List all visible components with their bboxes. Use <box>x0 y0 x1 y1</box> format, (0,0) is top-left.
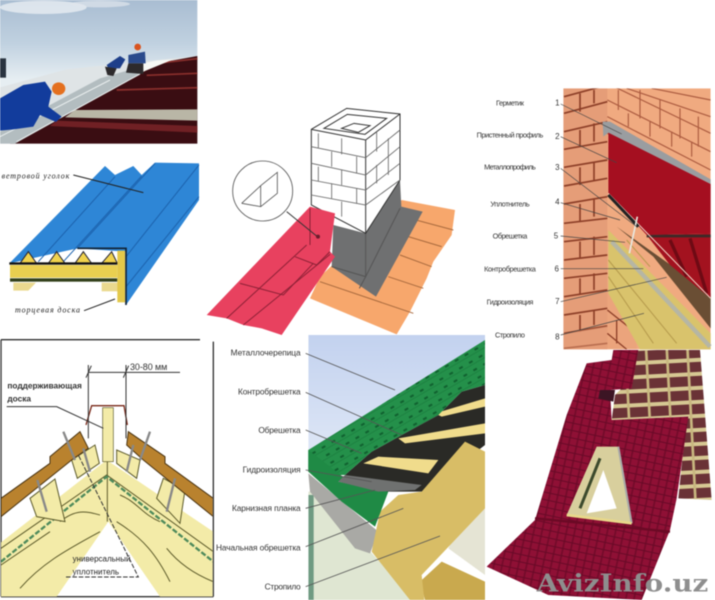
label: universal sealant: универсальный <box>73 555 130 564</box>
grey wall profile <box>603 122 711 184</box>
panel: photo of workers on roof <box>0 0 197 144</box>
timber end detail <box>9 248 126 305</box>
layer labels: Металлочерепица <box>231 348 301 358</box>
rafter <box>372 442 485 600</box>
layer numbers: 2 <box>555 132 560 141</box>
layer labels: Уплотнитель <box>490 199 530 208</box>
label: universal sealant: уплотнитель <box>73 567 119 576</box>
diagram frame <box>1 340 213 597</box>
orange roof base <box>310 200 455 334</box>
layer labels: Стропило <box>265 581 301 591</box>
panel: blue metal roof wind corner diagram <box>2 163 199 314</box>
timber lattice <box>612 350 712 500</box>
layer labels: Герметик <box>496 98 525 107</box>
layer labels: Карнизная планка <box>232 503 301 513</box>
label: support board: поддерживающая <box>7 380 82 390</box>
gutter <box>308 473 378 553</box>
arrow: wind corner <box>73 175 143 193</box>
layer labels: Обрешетка <box>493 231 528 240</box>
eaves line <box>535 518 670 532</box>
layer labels <box>216 348 301 591</box>
panel: green metal tile roof section <box>216 335 485 600</box>
red corrugated sheet <box>647 233 711 298</box>
panel: red tile roof with dormer <box>487 350 712 600</box>
red wall flashing <box>608 132 711 235</box>
dormer window <box>567 447 632 523</box>
brick chimney <box>311 108 400 233</box>
label: wind corner: ветровой уголок <box>2 171 70 180</box>
grey flashing <box>332 180 423 297</box>
layer labels <box>477 98 544 340</box>
shadow under lattice <box>598 390 615 402</box>
layer numbers: 5 <box>554 232 559 241</box>
panel: chimney flashing diagram <box>207 108 455 335</box>
label: support board: доска <box>7 394 31 404</box>
brick wall <box>563 83 711 349</box>
panel: ridge section diagram <box>1 340 213 597</box>
fastening screw <box>629 217 637 253</box>
leader lines <box>306 353 440 587</box>
layer labels: Гидроизоляция <box>243 465 301 475</box>
layer numbers: 4 <box>555 198 560 207</box>
blue roof sheets <box>9 163 199 305</box>
sky and building <box>308 335 485 600</box>
layer numbers: 6 <box>554 265 559 274</box>
underside and battens <box>345 385 485 492</box>
ridge screws <box>37 432 175 512</box>
leader lines <box>561 104 667 335</box>
layer numbers: 8 <box>555 332 560 341</box>
layer numbers: 3 <box>555 163 560 172</box>
arrow: universal sealant <box>66 455 138 577</box>
layer numbers <box>554 98 560 341</box>
green metal tile <box>308 340 485 475</box>
arrow: support board <box>7 407 103 428</box>
panel: wall junction with numbered layers <box>477 83 711 349</box>
layer labels: Пристенный профиль <box>477 131 544 140</box>
layer labels: Начальная обрешетка <box>216 542 301 552</box>
layer labels: Контробрешетка <box>484 264 537 273</box>
timber and membrane <box>608 227 711 349</box>
rafters <box>1 406 213 597</box>
label: end board: торцевая доска <box>15 305 80 314</box>
layer labels: Металлопрофиль <box>484 163 536 172</box>
dimension lines <box>86 365 180 438</box>
red roof tiles <box>207 207 335 335</box>
green eaves plate <box>308 450 388 527</box>
callout circle with flashing detail <box>233 161 320 239</box>
watermark: AvizInfo.uz <box>536 569 708 598</box>
layer labels: Контробрешетка <box>238 386 301 396</box>
layer labels: Обрешетка <box>258 425 301 435</box>
red tile roof <box>487 350 688 600</box>
label: dimension: 30-80 мм <box>130 362 167 372</box>
layer numbers: 1 <box>555 98 560 107</box>
arrow: end board <box>84 299 115 311</box>
layer labels: Гидроизоляция <box>487 298 533 307</box>
layer labels: Стропило <box>495 331 525 340</box>
layer numbers: 7 <box>555 297 560 306</box>
